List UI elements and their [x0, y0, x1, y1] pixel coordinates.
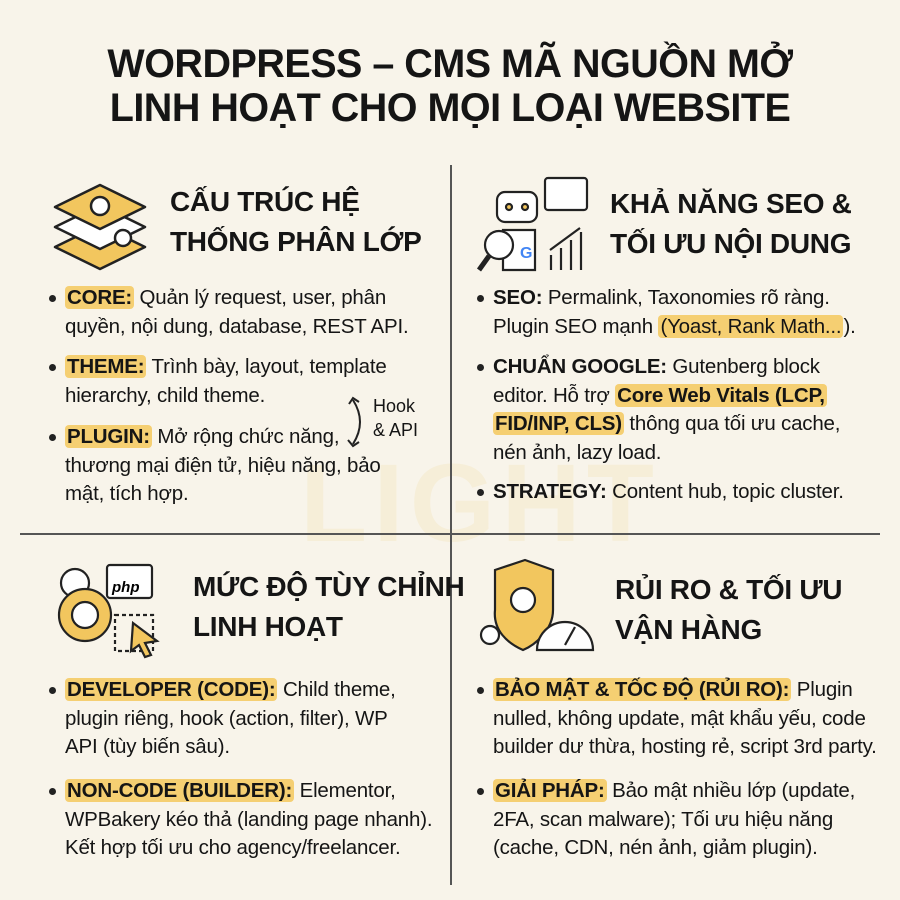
heading — [610, 188, 852, 259]
panel: customization — [49, 564, 464, 859]
bullets: quyền, nội dung, database, REST API. — [65, 314, 408, 338]
heading — [615, 574, 842, 645]
panel: risks: GIẢI PHÁP: Bảo mật nhiều lớp (update, — [495, 779, 855, 802]
heading: TỐI ƯU NỘI DUNG — [610, 228, 851, 259]
icon: robot seo — [477, 176, 588, 272]
bullets: builder dư thừa, hosting rẻ, script 3rd party. — [493, 735, 877, 758]
heading: THỐNG PHÂN LỚP — [170, 226, 421, 257]
panel: customization: WPBakery kéo thả (landing page nhanh). — [65, 808, 432, 830]
icon: php gear: php — [111, 579, 140, 596]
panel: risks: (cache, CDN, nén ảnh, giảm plugin). — [493, 836, 818, 859]
bullets — [477, 286, 856, 338]
icon: shield speed — [480, 558, 594, 652]
bullets: DEVELOPER (CODE): Child theme, — [67, 678, 396, 701]
arrow: hook & api — [347, 396, 418, 448]
heading: LINH HOẠT — [193, 611, 343, 642]
title: WORDPRESS – CMS MÃ NGUỒN MỞ — [107, 42, 793, 86]
panel: layered structure: thương mại điện tử, hiệu năng, bảo — [65, 454, 381, 476]
bullets: SEO: Permalink, Taxonomies rõ ràng. — [493, 286, 830, 309]
panel: layered structure: THEME: Trình bày, layout, template — [67, 355, 387, 378]
icon: layers — [54, 184, 146, 270]
bullets: BẢO MẬT & TỐC ĐỘ (RỦI RO): Plugin — [495, 678, 853, 701]
panel: customization: Kết hợp tối ưu cho agency/freelancer. — [65, 836, 400, 859]
arrow: hook & api: Hook — [373, 396, 415, 416]
panel: SEO: STRATEGY: Content hub, topic cluster. — [493, 480, 844, 503]
bullets — [49, 286, 408, 338]
panel: SEO — [477, 176, 856, 503]
bullets — [477, 678, 877, 758]
panel: SEO: FID/INP, CLS) thông qua tối ưu cache, — [495, 412, 840, 435]
panel: layered structure: mật, tích hợp. — [65, 482, 188, 505]
panel: customization: NON-CODE (BUILDER): Elementor, — [67, 779, 396, 802]
panel: layered structure: hierarchy, child theme. — [65, 384, 265, 406]
icon: robot seo: G — [520, 245, 532, 262]
panel: SEO: nén ảnh, lazy load. — [493, 440, 661, 464]
arrow: hook & api: & API — [373, 420, 418, 440]
bullets: plugin riêng, hook (action, filter), WP — [65, 706, 388, 730]
bullets: Plugin SEO mạnh (Yoast, Rank Math...). — [493, 314, 856, 338]
bullets: API (tùy biến sâu). — [65, 735, 230, 758]
title — [107, 42, 793, 130]
heading: CẤU TRÚC HỆ — [170, 186, 360, 217]
heading: VẬN HÀNG — [615, 614, 762, 645]
watermark: LIGHT — [300, 442, 660, 565]
heading — [193, 571, 464, 642]
heading: KHẢ NĂNG SEO & — [610, 188, 852, 219]
icon: php gear — [58, 564, 160, 658]
panel: risks — [477, 558, 877, 859]
heading — [170, 186, 421, 257]
bullets: nulled, không update, mật khẩu yếu, code — [493, 706, 866, 730]
panel: layered structure — [49, 184, 421, 505]
panel: layered structure: PLUGIN: Mở rộng chức năng, — [67, 425, 339, 448]
bullets: CORE: Quản lý request, user, phân — [67, 286, 386, 309]
heading: MỨC ĐỘ TÙY CHỈNH — [193, 571, 464, 602]
title: LINH HOẠT CHO MỌI LOẠI WEBSITE — [110, 86, 790, 130]
panel: SEO: CHUẨN GOOGLE: Gutenberg block — [493, 355, 820, 378]
panel: SEO: editor. Hỗ trợ Core Web Vitals (LCP, — [493, 384, 825, 406]
panel: risks: 2FA, scan malware); Tối ưu hiệu năng — [493, 808, 833, 830]
heading: RỦI RO & TỐI ƯU — [615, 574, 842, 605]
bullets — [49, 678, 396, 758]
